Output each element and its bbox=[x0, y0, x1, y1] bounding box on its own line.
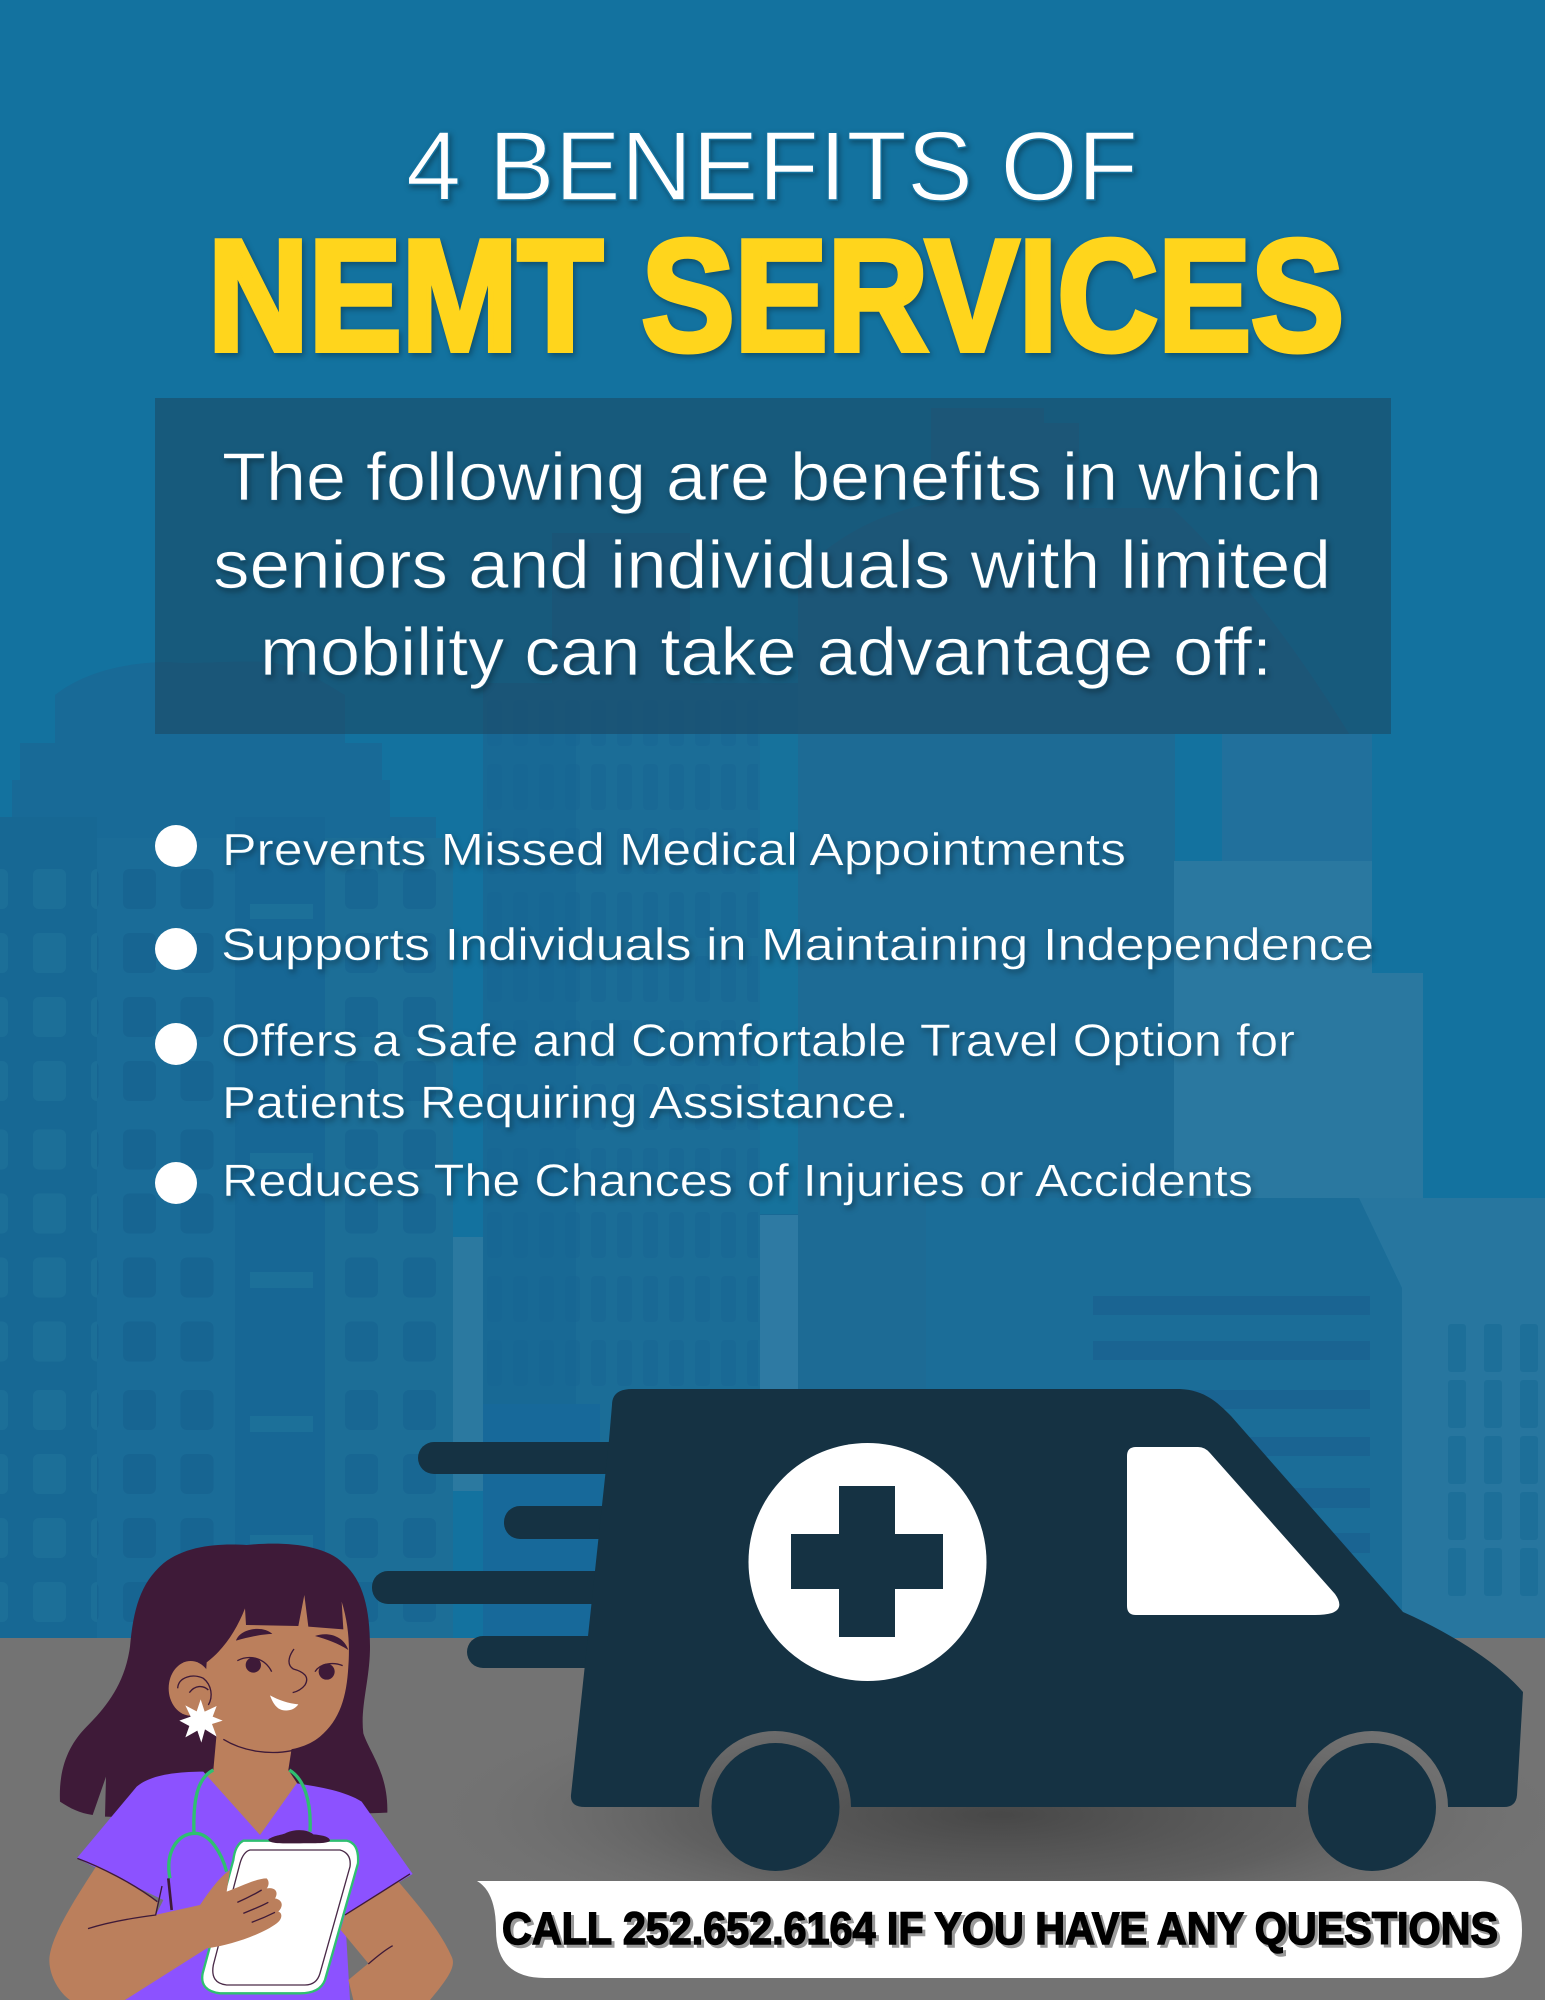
face bbox=[203, 1595, 349, 1751]
hair bbox=[60, 1544, 387, 1820]
benefits list bbox=[155, 824, 1374, 1206]
icon: ambulance van bbox=[372, 1389, 1523, 1871]
neck bbox=[200, 1733, 298, 1835]
city skyline background bbox=[0, 408, 1545, 1640]
intro text bbox=[213, 439, 1331, 690]
speed lines bbox=[372, 1442, 638, 1668]
clipboard bbox=[202, 1830, 358, 1993]
front wheel bbox=[1308, 1743, 1436, 1871]
intro text: The following are benefits in which bbox=[222, 439, 1322, 515]
title line: NEMT services: NEMT SERVICES bbox=[208, 208, 1344, 384]
bullet 3: Patients Requiring Assistance. bbox=[222, 1077, 909, 1128]
call to action bbox=[477, 1881, 1522, 1978]
intro text: mobility can take advantage off: bbox=[260, 614, 1272, 690]
arm and finger lines bbox=[77, 1858, 410, 1964]
scrubs bbox=[77, 1772, 413, 2000]
road bbox=[0, 1638, 1545, 2000]
medical cross emblem bbox=[748, 1443, 986, 1681]
bullet 3 bbox=[155, 1015, 1295, 1128]
bullet 4: Reduces The Chances of Injuries or Accidents bbox=[222, 1155, 1253, 1206]
bullet 2: Supports Individuals in Maintaining Independence bbox=[221, 919, 1374, 970]
rear wheel bbox=[712, 1743, 840, 1871]
ear bbox=[169, 1661, 213, 1716]
panel: intro bbox=[155, 398, 1391, 734]
earring bbox=[179, 1699, 223, 1743]
right arm bbox=[341, 1882, 453, 2000]
bullet 1: Prevents Missed Medical Appointments bbox=[222, 824, 1126, 875]
stethoscope bbox=[168, 1770, 310, 1910]
facial features bbox=[178, 1629, 348, 1752]
left arm and hand bbox=[49, 1866, 282, 2000]
intro text: seniors and individuals with limited bbox=[213, 527, 1331, 603]
van ground shadow bbox=[420, 1680, 1545, 1950]
title line: 4 benefits of: 4 BENEFITS OF bbox=[406, 111, 1138, 221]
bullet 3: Offers a Safe and Comfortable Travel Option for bbox=[221, 1015, 1295, 1066]
van body bbox=[571, 1389, 1523, 1807]
van window bbox=[1127, 1447, 1339, 1615]
title bbox=[208, 111, 1344, 384]
nurse illustration bbox=[49, 1544, 453, 2000]
